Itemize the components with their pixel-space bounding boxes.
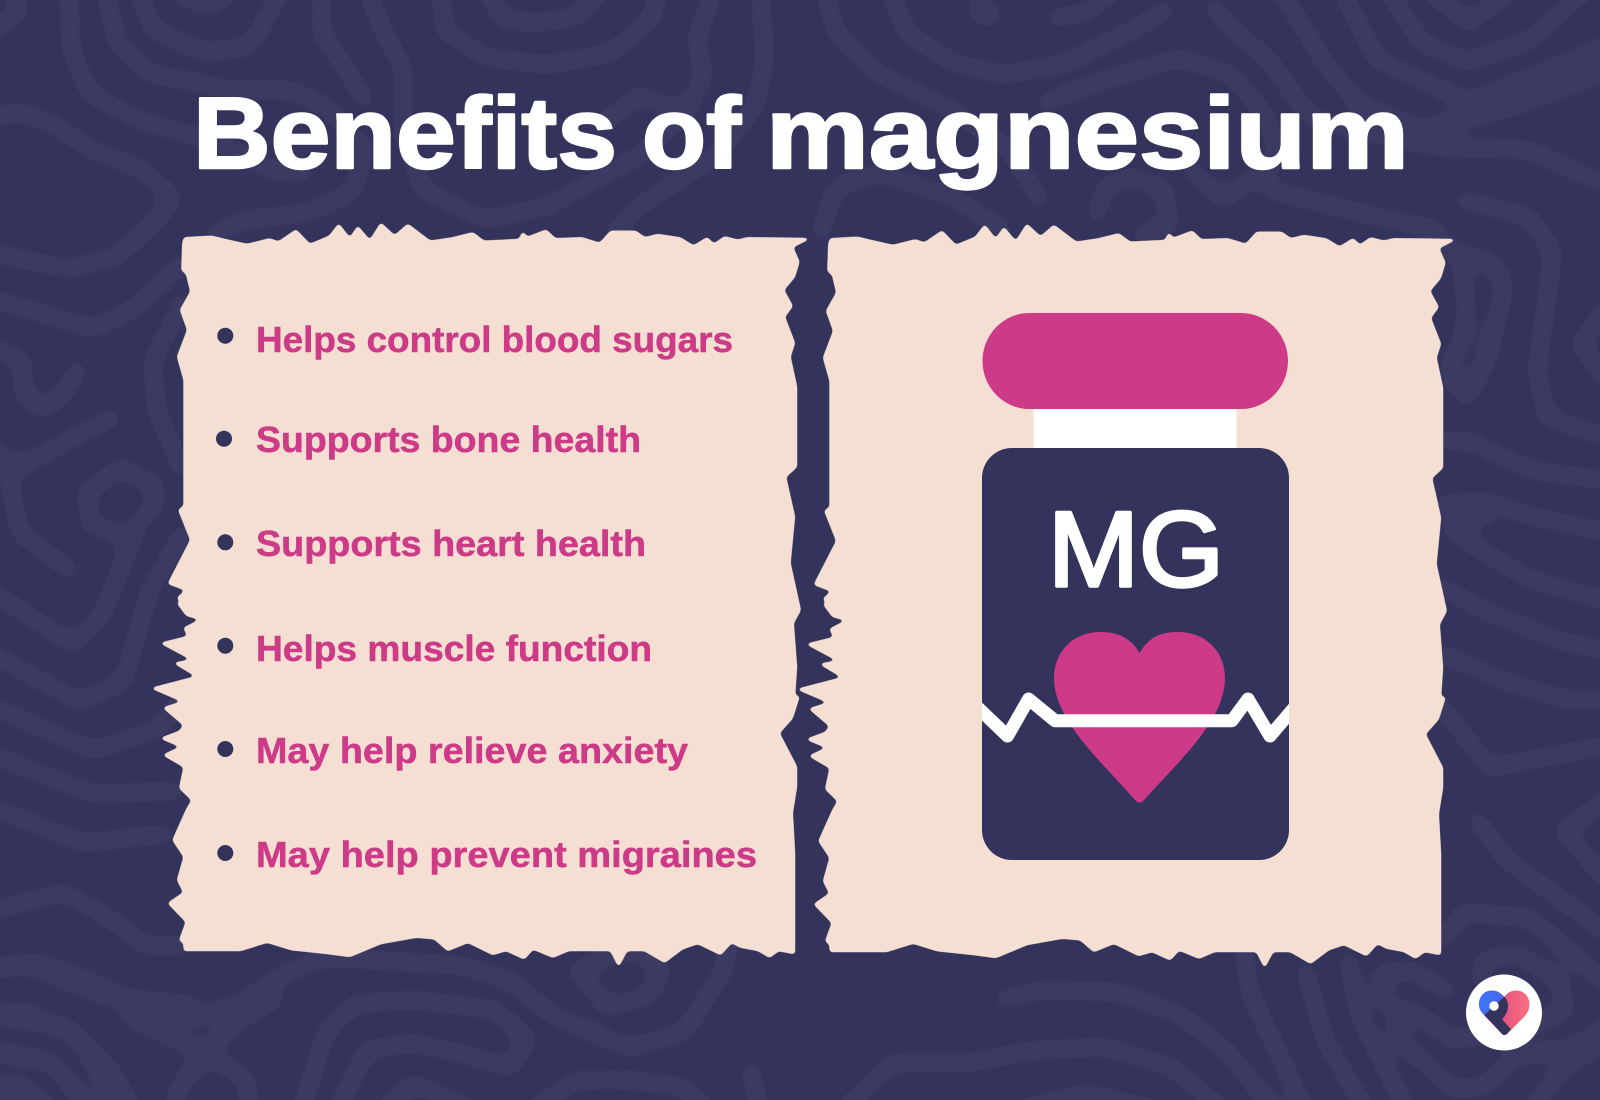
bullet item 1: Helps control blood sugars <box>256 319 733 360</box>
panel: benefits list <box>153 224 807 965</box>
bullet item 4: Helps muscle function <box>256 628 652 669</box>
title: Benefits <box>193 78 617 190</box>
pulse line <box>972 699 1299 736</box>
bullet item 2: Supports bone health <box>256 419 641 460</box>
bottle cap <box>982 313 1288 409</box>
icon: heart <box>1054 632 1225 802</box>
label: MG: MG <box>1048 489 1224 609</box>
title: of <box>642 78 741 190</box>
bullet item 6: May help prevent migraines <box>256 834 757 875</box>
bottle body <box>982 448 1289 860</box>
icon: magnesium bottle <box>972 313 1299 860</box>
bullet item 5: May help relieve anxiety <box>256 730 688 771</box>
title <box>193 78 1409 190</box>
bottle neck <box>1034 409 1236 448</box>
title: magnesium <box>766 78 1409 190</box>
bullet item 3: Supports heart health <box>256 523 646 564</box>
panel: bottle illustration <box>799 225 1453 966</box>
icon: logo badge <box>1466 974 1542 1050</box>
